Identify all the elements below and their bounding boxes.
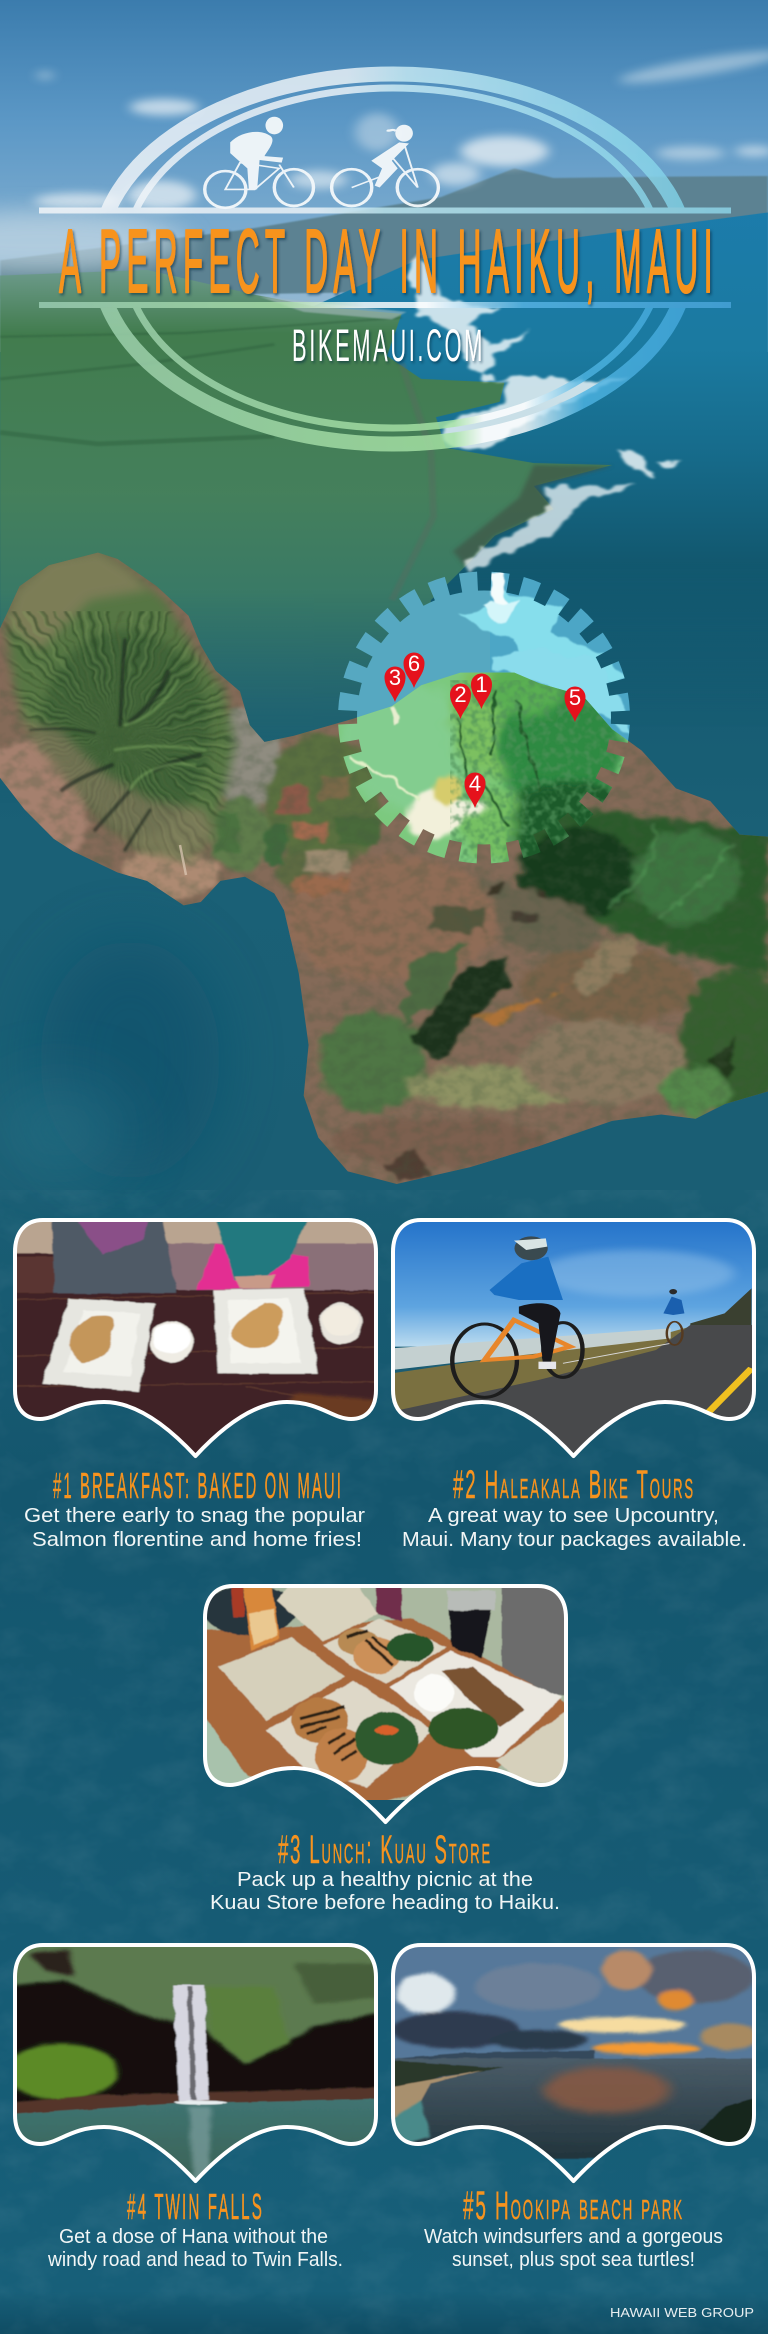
text: BIKEMAUI.COM <box>292 320 485 371</box>
description: Kuau Store before heading to Haiku. <box>210 1892 560 1914</box>
photo card: lunch <box>197 1580 577 1824</box>
photo card: hookipa sunset <box>382 1937 768 2181</box>
description: Pack up a healthy picnic at the <box>237 1869 533 1891</box>
photo card: twin falls <box>13 1943 378 2184</box>
panel: stop 3 <box>197 1580 577 1914</box>
pin 4: 4 <box>469 771 481 796</box>
header scene: aerial coast photo <box>0 0 768 804</box>
map of Maui <box>0 540 768 1200</box>
map pins <box>384 651 586 808</box>
pin 1 <box>471 672 492 709</box>
panel: stop 4: #4 TWIN FALLS <box>127 2186 264 2227</box>
description: A great way to see Upcountry, <box>428 1505 719 1527</box>
panel: stop 3: #3 Lunch: Kuau Store <box>278 1828 492 1872</box>
pin 6: 6 <box>408 651 420 676</box>
west Maui mountains <box>1 553 240 864</box>
panel: stop 2 <box>382 1213 768 1551</box>
description: sunset, plus spot sea turtles! <box>452 2249 695 2271</box>
description: Salmon florentine and home fries! <box>32 1529 362 1551</box>
pin 4 <box>464 771 486 808</box>
pin 3: 3 <box>389 665 401 690</box>
photo card: bike tours <box>391 1218 756 1458</box>
description: windy road and head to Twin Falls. <box>47 2249 343 2271</box>
logo rings and rules <box>39 74 731 444</box>
description: Watch windsurfers and a gorgeous <box>424 2226 723 2248</box>
description: Get there early to snag the popular <box>24 1505 365 1527</box>
description: Get a dose of Hana without the <box>59 2226 328 2248</box>
panel: stop 5 <box>382 1937 768 2271</box>
pin 5: 5 <box>569 685 581 710</box>
pin 3 <box>384 665 406 702</box>
pin 1: 1 <box>475 672 488 697</box>
panel: stop 4 <box>13 1943 378 2270</box>
panel: stop 1 <box>13 1218 378 1546</box>
pin 5 <box>564 685 586 722</box>
photo card: breakfast <box>13 1218 378 1458</box>
footer credit: HAWAII WEB GROUP <box>610 2306 754 2320</box>
gear highlight over Haiku <box>338 572 630 864</box>
icon: two cyclists <box>205 117 438 208</box>
icon: male cyclist <box>205 117 313 208</box>
pin 2: 2 <box>454 682 467 707</box>
pin 2 <box>450 682 471 719</box>
description: Maui. Many tour packages available. <box>402 1529 747 1551</box>
pin 6 <box>404 651 424 688</box>
icon: female cyclist <box>332 125 438 206</box>
text: #1 BREAKFAST: BAKED ON MAUI <box>53 1465 343 1506</box>
